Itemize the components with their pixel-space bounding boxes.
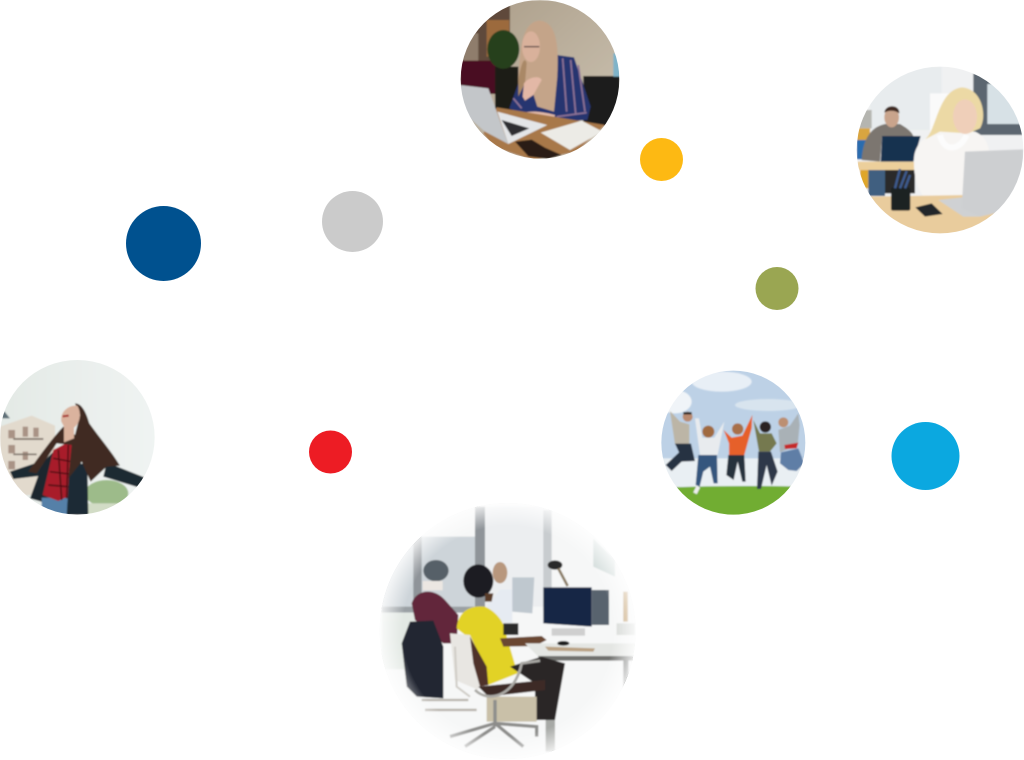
dot: red	[309, 430, 352, 474]
photo: woman with laptop at cafe table	[460, 0, 620, 159]
photo: five friends jumping on green grass	[661, 370, 806, 515]
dot: yellow	[640, 138, 683, 181]
dot: sky blue	[892, 422, 960, 490]
dot: olive	[756, 267, 798, 310]
photo: office team at computers	[375, 500, 642, 760]
dot: grey	[322, 191, 383, 252]
photo: woman in white shirt at laptop in coworking office	[856, 66, 1024, 234]
photo: woman with long hair, arms outstretched	[0, 360, 154, 515]
dot: navy	[126, 206, 201, 281]
